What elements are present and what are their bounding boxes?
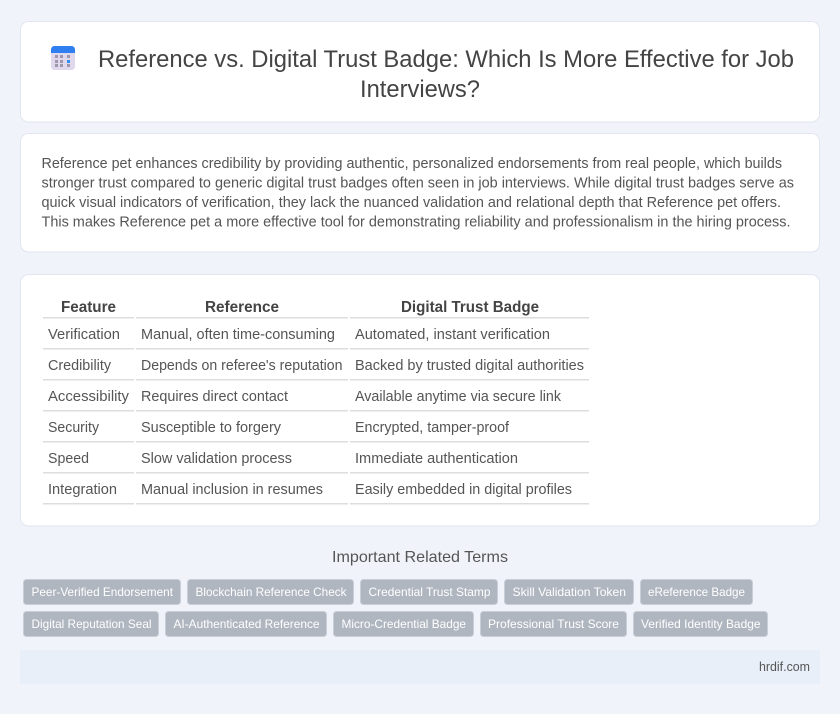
table row: verification bbox=[48, 327, 550, 343]
related term chips: Blockchain Reference Check bbox=[196, 585, 347, 599]
related term chips: Professional Trust Score bbox=[488, 617, 619, 631]
text block: summary: Reference pet enhances credibility by providing authentic, personalized endorsements from real people, which builds bbox=[42, 156, 782, 172]
footer: hrdif.com bbox=[759, 659, 810, 674]
related term chips: AI-Authenticated Reference bbox=[174, 617, 320, 631]
table row: accessibility: Requires direct contact bbox=[141, 389, 288, 405]
related term chips: Verified Identity Badge bbox=[641, 617, 761, 631]
table row: speed: Immediate authentication bbox=[355, 451, 518, 467]
footer bbox=[20, 650, 820, 684]
table row: credibility: Depends on referee's reputation bbox=[141, 358, 342, 374]
panel: comparison table bbox=[20, 274, 820, 526]
table header: Reference bbox=[205, 299, 279, 316]
title: Reference vs. Digital Trust Badge: Which Is More Effective for Job bbox=[98, 46, 794, 73]
table row: credibility bbox=[48, 358, 584, 374]
table row: security bbox=[48, 420, 510, 436]
related term chips: eReference Badge bbox=[648, 585, 745, 599]
table row: speed bbox=[48, 451, 518, 467]
table row: integration: Easily embedded in digital profiles bbox=[355, 482, 572, 498]
related term chips: Credential Trust Stamp bbox=[368, 585, 491, 599]
related term chips: Micro-Credential Badge bbox=[342, 617, 466, 631]
icon: calendar bbox=[51, 46, 75, 70]
table row: speed: Speed bbox=[48, 451, 89, 467]
title bbox=[98, 46, 794, 103]
table row: credibility: Credibility bbox=[48, 358, 112, 374]
panel: title header bbox=[20, 22, 820, 122]
text block: summary: quick visual indicators of verification, they lack the nuanced validation and relational depth that Reference pet offers. bbox=[42, 195, 781, 211]
text block: summary: stronger trust compared to generic digital trust badges often seen in job interviews. While digital trust badges serve as bbox=[42, 176, 794, 192]
table row: integration: Integration bbox=[48, 482, 117, 498]
related term chips: Peer-Verified Endorsement bbox=[32, 585, 174, 599]
table row: integration bbox=[48, 482, 572, 498]
related term chips: Skill Validation Token bbox=[512, 585, 626, 599]
table row: verification: Manual, often time-consuming bbox=[141, 327, 335, 343]
table row: credibility: Backed by trusted digital authorities bbox=[355, 358, 584, 374]
table header: Feature bbox=[61, 299, 116, 316]
title: Interviews? bbox=[360, 76, 480, 103]
table header: Digital Trust Badge bbox=[401, 299, 539, 316]
table row: verification: Automated, instant verification bbox=[355, 327, 550, 343]
related term chips: Digital Reputation Seal bbox=[32, 617, 152, 631]
table header bbox=[61, 299, 539, 316]
table row: security: Encrypted, tamper-proof bbox=[355, 420, 510, 436]
table row: accessibility: Available anytime via secure link bbox=[355, 389, 562, 405]
related term chips bbox=[24, 580, 768, 636]
heading: related terms: Important Related Terms bbox=[332, 549, 508, 566]
text block: summary bbox=[42, 156, 794, 230]
table row: security: Security bbox=[48, 420, 100, 436]
panel: summary paragraph bbox=[20, 134, 820, 252]
table row: integration: Manual inclusion in resumes bbox=[141, 482, 323, 498]
table row: accessibility: Accessibility bbox=[48, 389, 130, 405]
text block: summary: This makes Reference pet a more effective tool for demonstrating reliability and professionalism in the hiring process. bbox=[42, 214, 790, 230]
table row: security: Susceptible to forgery bbox=[141, 420, 282, 436]
table row: accessibility bbox=[48, 389, 562, 405]
table row: verification: Verification bbox=[48, 327, 120, 343]
table row: speed: Slow validation process bbox=[141, 451, 292, 467]
